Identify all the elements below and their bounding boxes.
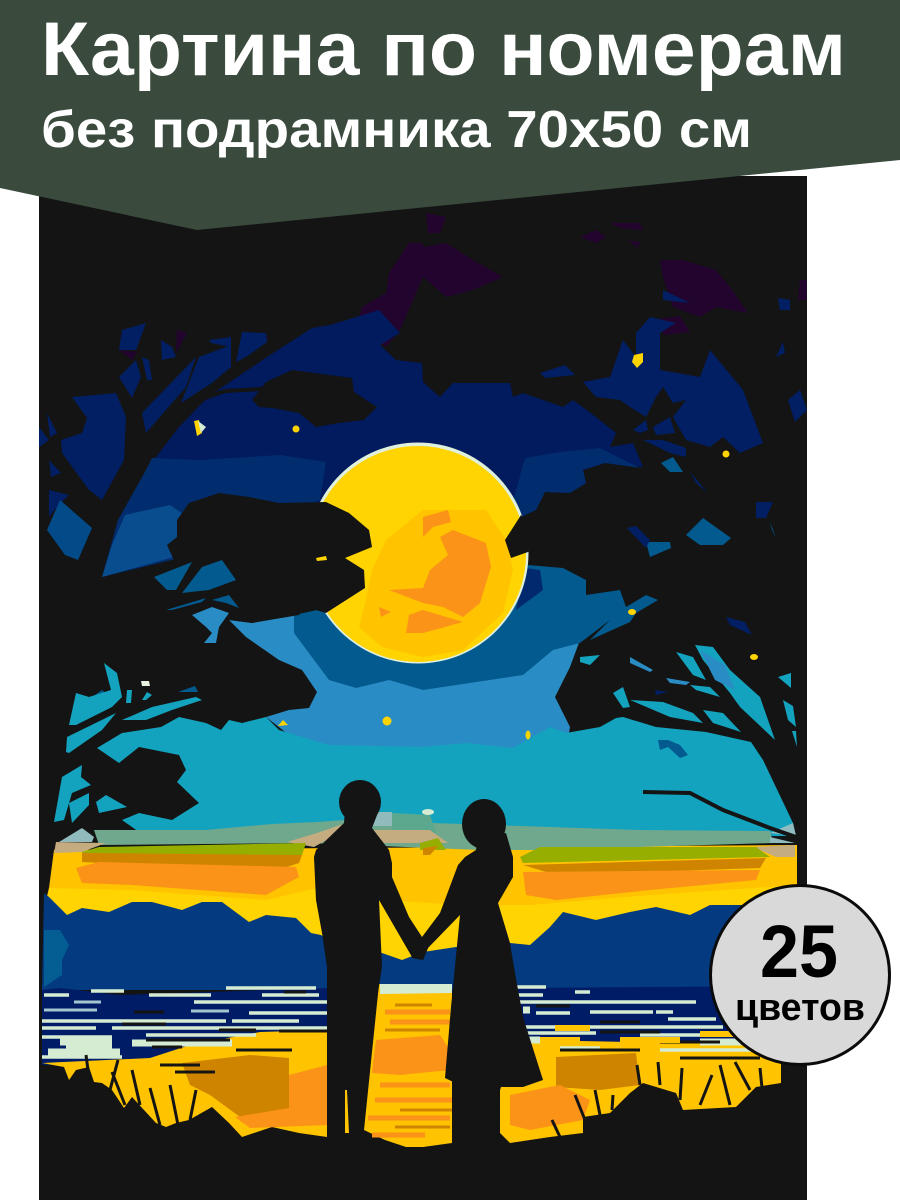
sky gaps: left tree	[54, 560, 239, 823]
sky: navy main region	[146, 310, 643, 560]
foreground grass: blades over water	[86, 1055, 762, 1137]
sea: pale thick foam	[48, 1010, 760, 1052]
moon	[308, 442, 528, 664]
distant blue clouds	[42, 893, 800, 990]
sky: dark blue layer under moon	[294, 565, 658, 690]
sky: left trunk panel	[47, 500, 92, 560]
tree: left foliage clumps	[148, 370, 377, 623]
badge: 25 colours: 25	[760, 910, 838, 993]
reflection: orange block	[372, 1035, 450, 1075]
sky: teal layer	[97, 717, 796, 838]
silhouette: man	[314, 780, 428, 1145]
subtitle: без подрамника 70х50 см	[41, 101, 752, 159]
sea: navy water	[42, 988, 330, 1065]
header banner	[0, 0, 900, 230]
sky gaps: right tree	[580, 457, 797, 837]
horizon: golden sunset base	[46, 845, 797, 960]
silhouette: woman	[410, 799, 543, 1140]
horizon: green and grey bands	[54, 812, 795, 863]
sky: blue layer right of moon	[512, 448, 640, 517]
gap between man's legs	[345, 1090, 349, 1133]
reflection: pale band	[380, 984, 452, 994]
sky: lighter blue fan left	[102, 505, 192, 577]
moon glints near foliage	[316, 556, 327, 561]
sea: black ripples	[122, 992, 760, 1072]
title: Картина по номерам	[41, 7, 846, 92]
sky: navy panels between right branches	[540, 290, 807, 518]
sea: right gold shoreline	[500, 1040, 781, 1143]
sky: navy wedge beside moon	[516, 568, 543, 610]
sky: navy panels between left branches	[39, 323, 267, 517]
sea: left brown reflection	[182, 1055, 289, 1117]
reflection: orange streaks	[368, 1012, 452, 1135]
sea: pale wave highlights	[42, 987, 780, 1057]
fireflies and stars	[194, 353, 758, 815]
painting: moonlit couple by the sea	[39, 176, 807, 1200]
sea: left orange reflection	[235, 1065, 327, 1128]
reflection: brown streaks	[385, 1005, 452, 1127]
badge: 25 colours: цветов	[735, 987, 865, 1029]
sunset: bright yellow lower band	[46, 885, 797, 962]
sky: blue layer left of moon	[102, 455, 326, 577]
sea: blue-grey ripples	[44, 1002, 229, 1011]
sea: right brown reflection	[556, 1053, 640, 1090]
sea: gold glints on right water	[540, 1028, 740, 1040]
cloud: teal patch at left	[44, 930, 69, 987]
sunset: brown and orange streaks	[76, 846, 766, 900]
sea: moon reflection column	[364, 984, 452, 1147]
purple foliage patches	[119, 213, 807, 360]
sea: right orange reflection	[510, 1085, 590, 1130]
badge: 25 colours	[710, 886, 890, 1064]
sky: light blue layer	[229, 613, 580, 752]
sea: left gold shoreline	[42, 1030, 327, 1137]
tree: right foliage over moon	[505, 515, 545, 558]
